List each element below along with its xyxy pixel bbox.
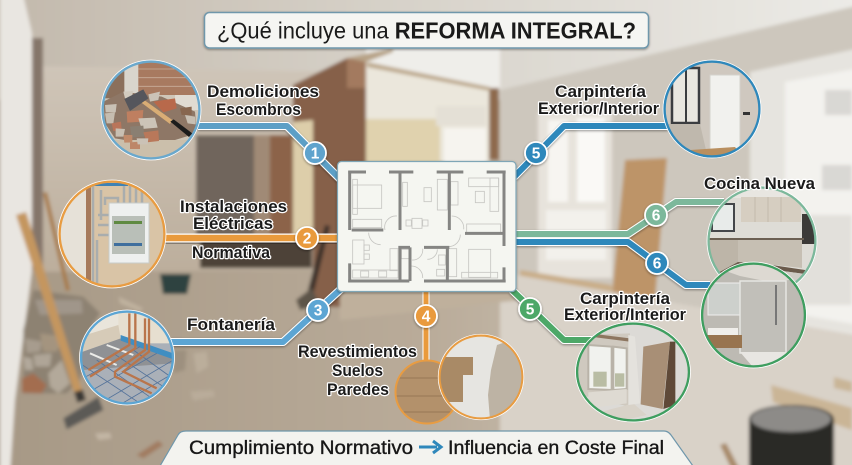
panel: revestimientos suelos — [394, 360, 454, 424]
panel: instalaciones electricas — [58, 180, 168, 290]
icon: electrical panel photo — [60, 182, 164, 286]
label: normativa: Normativa — [192, 244, 271, 262]
label: revestimientos suelos paredes: Revestimientos — [298, 343, 417, 361]
panel: revestimientos paredes — [438, 334, 526, 420]
badge 4: 4 — [422, 308, 431, 326]
badge 1: 1 — [311, 146, 320, 162]
badge 2 — [296, 227, 318, 249]
label: fontaneria: Fontanería — [187, 316, 276, 334]
badge 6 green — [645, 204, 667, 226]
icon: rubble and sledgehammer photo — [104, 62, 198, 149]
label: instalaciones electricas — [180, 198, 287, 233]
badge 1 — [304, 142, 326, 164]
label: carpinteria bottom: Exterior/Interior — [564, 306, 687, 324]
panel: carpinteria exterior interior (green) — [575, 322, 692, 423]
badge 4 — [415, 305, 437, 327]
icon: wood flooring photo — [396, 362, 452, 422]
badge 6 green: 6 — [652, 208, 661, 224]
connector 6: bano blue — [516, 242, 710, 285]
rubble in background — [22, 290, 215, 458]
label: instalaciones electricas: Eléctricas — [193, 215, 273, 233]
badge 5 blue: 5 — [532, 146, 541, 162]
label: instalaciones electricas: Instalaciones — [180, 198, 287, 216]
connector 5: carpinteria green — [512, 290, 592, 340]
badge 5 green: 5 — [526, 302, 535, 318]
icon: kitchen photo — [710, 190, 814, 282]
label: revestimientos suelos paredes: Paredes — [327, 381, 389, 399]
label: carpinteria bottom — [564, 290, 687, 324]
connector 3: fontaneria — [171, 288, 342, 342]
connector 4: revestimientos — [422, 288, 430, 362]
icon: window and wooden door photo — [578, 325, 688, 419]
footer banner: Influencia en Coste Final — [448, 438, 664, 459]
footer banner: Cumplimiento Normativo — [189, 438, 413, 459]
badge 2: 2 — [303, 230, 311, 248]
label: carpinteria bottom: Carpintería — [580, 290, 671, 308]
badge 6 blue — [646, 252, 668, 274]
connector 2: instalaciones — [163, 238, 340, 239]
badge 5 green — [519, 298, 541, 320]
floor plan panel — [338, 162, 516, 292]
panel: demoliciones y escombros — [100, 58, 203, 163]
panel: bano nuevo — [700, 262, 808, 370]
panel: fontaneria — [80, 310, 175, 407]
panel: cocina nueva — [706, 186, 818, 284]
label: carpinteria top: Exterior/Interior — [538, 100, 660, 118]
label: demoliciones: Demoliciones — [207, 83, 319, 101]
label: carpinteria top: Carpintería — [555, 83, 647, 101]
label: demoliciones: Escombros — [216, 101, 301, 119]
badge 6 blue: 6 — [653, 256, 662, 272]
icon: copper pipes and underfloor grid photo — [82, 312, 172, 402]
connector 5: carpinteria blue — [514, 126, 668, 177]
footer banner — [160, 431, 693, 465]
badge 3 — [307, 299, 329, 321]
arrow — [419, 441, 441, 453]
badge 5 blue — [525, 142, 547, 164]
connector 6: cocina green — [516, 202, 724, 234]
label: carpinteria top — [538, 83, 660, 118]
icon: window and door photo — [668, 66, 758, 156]
title banner: ¿Qué incluye una REFORMA INTEGRAL? — [217, 18, 636, 44]
connector 1: demoliciones — [198, 126, 340, 179]
label: cocina nueva: Cocina Nueva — [704, 175, 816, 193]
icon: bathroom photo — [703, 264, 804, 366]
panel: carpinteria exterior interior (blue) — [662, 60, 762, 162]
badge 3: 3 — [314, 302, 323, 320]
label: demoliciones — [207, 83, 319, 119]
floor plan drawing — [348, 171, 506, 282]
label: revestimientos suelos paredes — [298, 343, 417, 399]
icon: wall plaster photo — [440, 336, 522, 418]
label: revestimientos suelos paredes: Suelos — [332, 362, 383, 380]
